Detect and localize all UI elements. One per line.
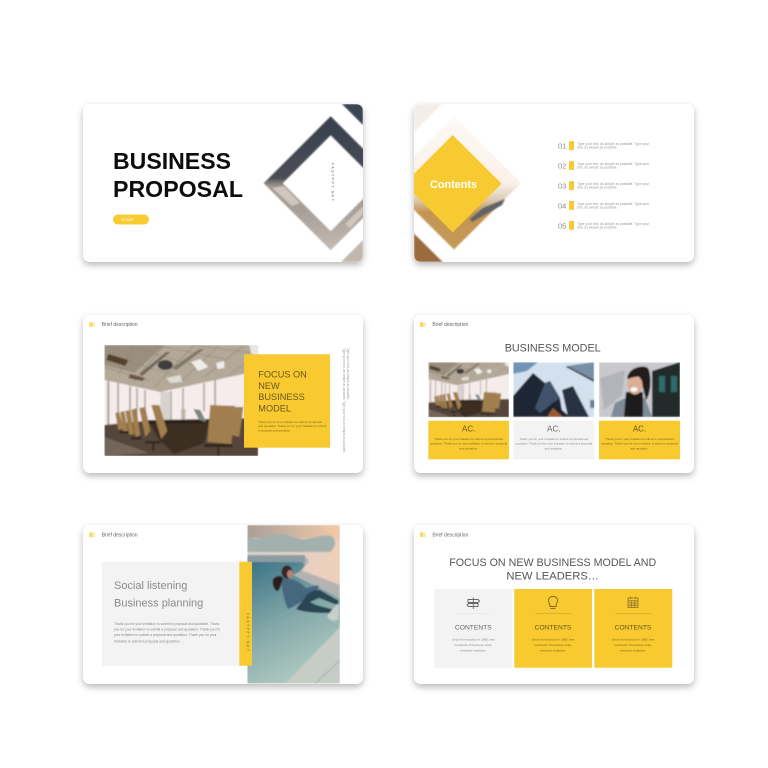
callout body	[258, 420, 326, 432]
card: grey middle: AC.	[547, 425, 560, 434]
item 03: Type your text, as simple as possible. Type your	[577, 182, 650, 186]
paragraph: invitation to submit a proposal and quotation.	[114, 640, 180, 644]
card: yellow left: Thank you for your invitation to submit a proposal and	[434, 437, 503, 441]
icon: light bulb	[548, 596, 558, 608]
card: grey middle: quotation. Thank you for your invitation to submit a proposal	[516, 442, 592, 446]
paragraph: you for your invitation to submit a proposal and quotation. Thank you for	[114, 628, 221, 632]
callout heading	[258, 370, 307, 414]
corner: top right dark	[342, 104, 363, 125]
item 05: text, as simple as possible.	[577, 226, 618, 230]
card: signpost	[434, 589, 512, 668]
title: BUSINESS	[113, 148, 231, 174]
callout heading: FOCUS ON	[258, 370, 307, 380]
paragraph: Thank you for your invitation to submit a proposal and quotation. Thank	[114, 622, 220, 626]
grey text panel	[102, 562, 239, 666]
slide: Focus on new business model	[83, 315, 363, 473]
item 01	[558, 141, 650, 150]
card: yellow left	[428, 421, 509, 459]
card: signpost: CONTENTS	[455, 624, 492, 632]
card: grey middle	[513, 421, 594, 459]
card: grey middle: Thank you for your invitation to submit a proposal and	[519, 437, 589, 441]
header: Brief description	[432, 322, 468, 328]
card: yellow left: quotation. Thank you for your invitation to submit a proposal	[430, 442, 507, 446]
icon: signpost	[467, 598, 480, 609]
card: grey middle: and quotation.	[545, 447, 563, 451]
card: signpost: research institutes.	[460, 648, 486, 652]
card: yellow left: AC.	[462, 425, 475, 434]
card: light bulb: hundreds of business units,	[534, 643, 572, 647]
callout heading: NEW	[258, 381, 280, 391]
vertical side text: Type your text, as simple as possible.	[346, 348, 350, 400]
yellow strip: FASTPPT.NET	[246, 613, 250, 652]
title: PROPOSAL	[113, 176, 243, 202]
title: BUSINESS MODEL	[505, 342, 601, 354]
item 02	[558, 161, 650, 170]
slide: Business model	[414, 315, 694, 473]
item 04	[558, 201, 650, 210]
skater torso	[281, 578, 319, 609]
diamond photo	[414, 118, 520, 250]
card: yellow right: AC.	[633, 425, 646, 434]
item 02: 02	[558, 162, 566, 170]
card: light bulb	[514, 589, 592, 668]
corner: bottom left	[414, 234, 443, 262]
card: calendar: CONTENTS	[615, 624, 652, 632]
card: calendar: hundreds of business units,	[614, 643, 652, 647]
yellow strip	[239, 562, 252, 666]
heading: Contents	[430, 179, 477, 191]
callout body: a proposal and quotation.	[258, 428, 291, 432]
paragraph: your invitation to submit a proposal and quotation. Thank you for your	[114, 633, 217, 637]
photo: skyscrapers	[513, 362, 595, 417]
item 01: 01	[558, 142, 566, 150]
header: Brief description	[102, 322, 138, 328]
item 01: Type your text, as simple as possible. Type your	[577, 142, 650, 146]
skater legs	[296, 590, 339, 613]
start button	[113, 214, 149, 224]
item 05	[558, 221, 650, 231]
photo: boardroom	[428, 361, 509, 419]
corner: top left	[414, 104, 442, 132]
skateboard	[327, 604, 339, 621]
title	[449, 557, 656, 582]
slide: Social listening	[83, 525, 363, 684]
title: NEW LEADERS…	[506, 570, 599, 582]
skater hair and head	[273, 576, 283, 591]
item 04: Type your text, as simple as possible. Type your	[577, 202, 650, 206]
callout heading: MODEL	[258, 404, 291, 414]
photo: smiling woman	[599, 362, 680, 417]
card: signpost: Since its inception in 1983, has	[452, 637, 495, 641]
photo: boardroom	[104, 345, 258, 456]
title: FOCUS ON NEW BUSINESS MODEL AND	[449, 557, 656, 569]
vertical side text	[342, 348, 350, 453]
card: yellow right: quotation. Thank you for your invitation to submit a proposal	[601, 442, 678, 446]
header: Brief description	[432, 532, 468, 538]
vertical side text: Type your text, as simple as possible. Type your text, as simple as possible.	[342, 348, 346, 453]
card: calendar: Since its inception in 1983, has	[612, 637, 655, 641]
header: Brief description	[102, 532, 138, 538]
item 03	[558, 181, 650, 191]
card: yellow right	[599, 421, 680, 459]
yellow diamond	[404, 135, 502, 232]
item 02: text, as simple as possible.	[577, 166, 618, 170]
card: calendar: research institutes.	[620, 648, 646, 652]
sea band in photo	[470, 199, 505, 222]
list	[558, 141, 650, 231]
slide: Focus on new leaders	[414, 525, 694, 684]
item 01: text, as simple as possible.	[577, 146, 618, 150]
card: light bulb: research institutes.	[540, 648, 566, 652]
item 04: text, as simple as possible.	[577, 206, 618, 210]
title	[113, 148, 243, 202]
vertical brand text: FASTPPT.NET	[330, 163, 334, 202]
item 02: Type your text, as simple as possible. Type your	[577, 162, 650, 166]
item 03: text, as simple as possible.	[577, 186, 618, 190]
callout body: Thank you for your invitation to submit a proposal	[258, 420, 322, 424]
paragraph	[114, 622, 221, 644]
headings: Business planning	[114, 597, 203, 609]
item 05: Type your text, as simple as possible. Type your	[577, 222, 650, 226]
slide: Business Proposal cover	[83, 104, 398, 262]
photo: skater in pool	[247, 525, 340, 684]
corner: bottom right light	[341, 240, 363, 262]
card: yellow right: Thank you for your invitation to submit a proposal and	[605, 437, 674, 441]
item 03: 03	[558, 182, 566, 191]
yellow callout	[244, 354, 330, 448]
item 04: 04	[558, 202, 566, 210]
card: calendar	[594, 589, 672, 668]
callout body: and quotation. Thank you for your invitation to submit	[258, 424, 326, 428]
slide: Contents	[387, 104, 694, 262]
card: yellow right: and quotation.	[630, 447, 649, 451]
diamond photo frame	[263, 116, 363, 250]
headings: Social listening	[114, 580, 187, 592]
rock streaks on the frame	[272, 186, 363, 228]
card: light bulb: CONTENTS	[535, 624, 572, 632]
card: light bulb: Since its inception in 1983, has	[532, 637, 575, 641]
icon: calendar	[628, 597, 638, 608]
card: yellow left: and quotation.	[460, 447, 478, 451]
card: signpost: hundreds of business units,	[454, 643, 492, 647]
item 05: 05	[558, 222, 566, 231]
headings	[114, 580, 203, 609]
start button: START	[121, 217, 134, 222]
callout heading: BUSINESS	[258, 392, 305, 402]
